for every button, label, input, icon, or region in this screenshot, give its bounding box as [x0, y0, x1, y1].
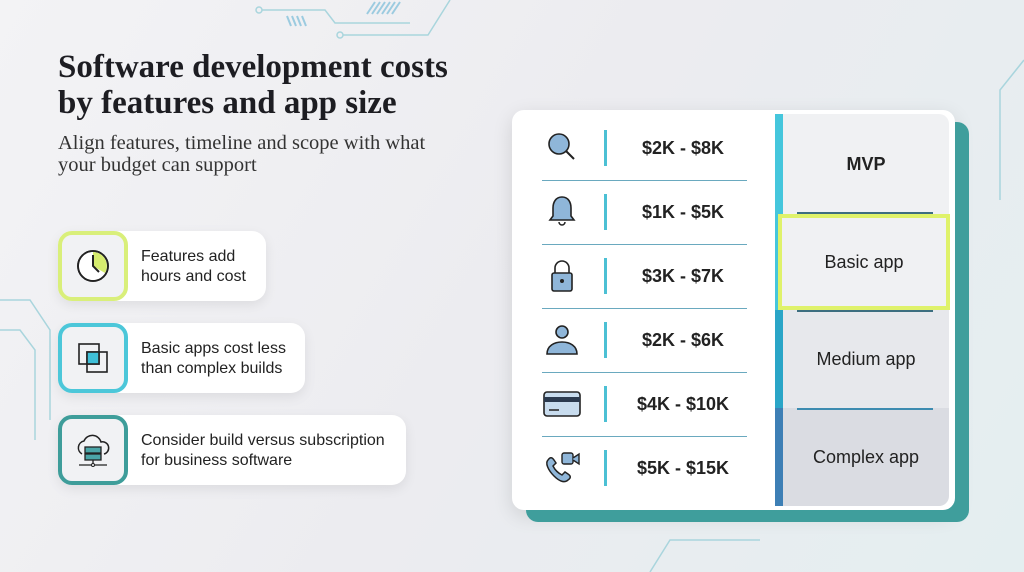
row: security — [551, 258, 724, 294]
row: user — [546, 322, 724, 358]
row: security: $3K - $7K — [642, 266, 724, 286]
tier: Complex app — [783, 408, 949, 506]
row: calls — [546, 450, 729, 486]
row: payments — [543, 386, 729, 422]
row: user: $2K - $6K — [642, 330, 724, 350]
row: calls: $5K - $15K — [637, 458, 729, 478]
tier: Basic app: Basic app — [824, 252, 904, 272]
card: features add hours: Features add — [141, 248, 235, 265]
tier: Medium app: Medium app — [816, 348, 916, 368]
card: features add hours — [58, 231, 266, 301]
title: by features and app size — [58, 85, 397, 121]
subtitle: Align features, timeline and scope with what — [58, 132, 425, 154]
subtitle — [58, 132, 426, 176]
tier: Complex app: Complex app — [813, 446, 919, 466]
tier: MVP — [783, 114, 949, 214]
card: build vs subscription: Consider build versus subscription — [141, 432, 385, 449]
icon: clock — [58, 231, 128, 301]
card: basic apps: than complex builds — [141, 360, 282, 377]
card: basic apps — [58, 323, 305, 393]
subtitle: your budget can support — [58, 154, 257, 176]
card: basic apps: Basic apps cost less — [141, 340, 286, 357]
card: features add hours: hours and cost — [141, 268, 246, 285]
row: notifications: $1K - $5K — [642, 202, 724, 222]
tier stripe — [775, 114, 783, 506]
row: notifications — [548, 194, 724, 230]
title — [58, 49, 448, 121]
title: Software development costs — [58, 49, 448, 85]
card: build vs subscription: for business software — [141, 452, 292, 469]
row: search: $2K - $8K — [642, 138, 724, 158]
panel: cost table — [512, 110, 955, 510]
icon: overlapping squares — [58, 323, 128, 393]
row: payments: $4K - $10K — [637, 394, 729, 414]
icon: cloud server — [58, 415, 128, 485]
card: build vs subscription — [58, 415, 406, 485]
tier: Basic app — [778, 214, 950, 310]
tier: Medium app — [783, 310, 949, 408]
row: search — [548, 130, 724, 166]
tier: MVP: MVP — [846, 154, 886, 174]
